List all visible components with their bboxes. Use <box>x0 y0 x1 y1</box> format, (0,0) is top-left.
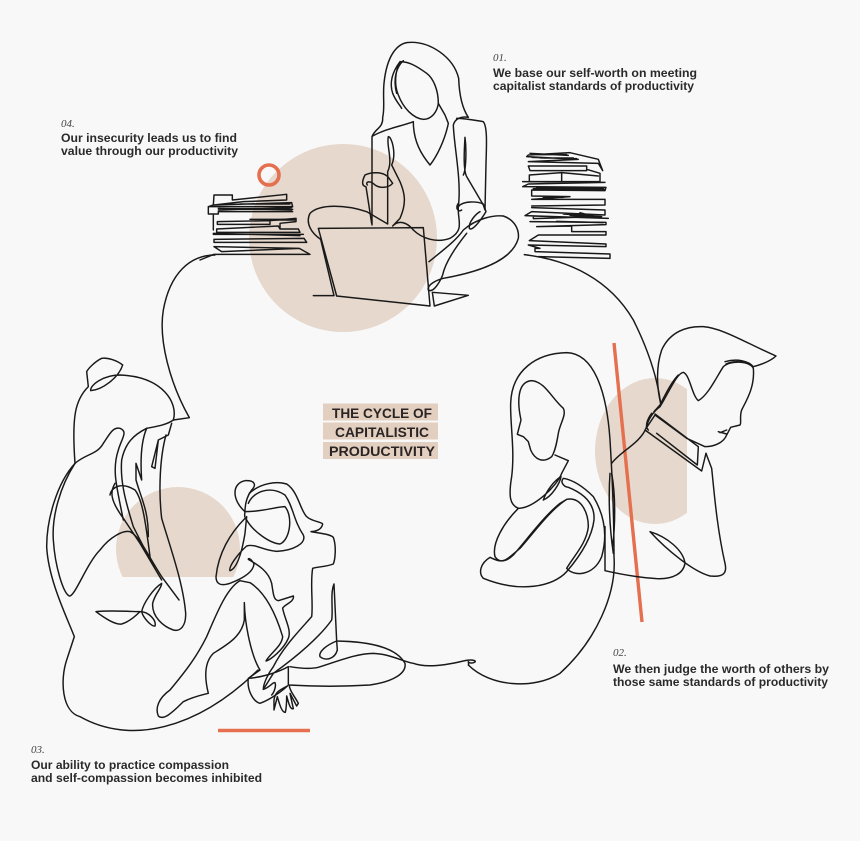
illustration: woman with laptop <box>200 42 518 306</box>
center title <box>323 404 438 459</box>
label: step 04: Our insecurity leads us to find <box>61 131 237 145</box>
illustration: book stack and connecting line <box>523 153 776 412</box>
label: step 04: value through our productivity <box>61 144 238 158</box>
label: step 01: capitalist standards of productivity <box>493 79 694 93</box>
beige circle behind seated woman <box>249 144 437 332</box>
label: step 02 <box>613 647 829 689</box>
label: step 02: those same standards of productivity <box>613 675 828 689</box>
label: step 01 <box>493 52 697 93</box>
man's hair <box>654 327 776 412</box>
illustration: hooded figure <box>47 255 258 730</box>
center title: PRODUCTIVITY <box>329 443 436 459</box>
label: step 04: 04. <box>61 118 75 130</box>
label: step 01: We base our self-worth on meeting <box>493 66 697 80</box>
label: step 02: 02. <box>613 647 627 659</box>
center title: CAPITALISTIC <box>335 424 429 440</box>
books left <box>200 247 310 260</box>
beige half circle behind lower figures <box>116 487 240 577</box>
label: step 03 <box>31 744 262 785</box>
label: step 04 <box>61 118 238 158</box>
beige shape behind man <box>595 378 687 524</box>
label: step 03: 03. <box>31 744 45 756</box>
illustration: woman and man back to back <box>468 353 754 684</box>
label: step 01: 01. <box>493 52 507 64</box>
center title: THE CYCLE OF <box>332 405 432 421</box>
illustration: seated figure <box>157 481 475 717</box>
label: step 03: Our ability to practice compassion <box>31 758 229 772</box>
orange ring accent <box>259 165 279 185</box>
label: step 02: We then judge the worth of others by <box>613 662 829 676</box>
orange horizontal line <box>218 729 310 732</box>
label: step 03: and self-compassion becomes inhibited <box>31 771 262 785</box>
orange diagonal line <box>614 343 642 622</box>
